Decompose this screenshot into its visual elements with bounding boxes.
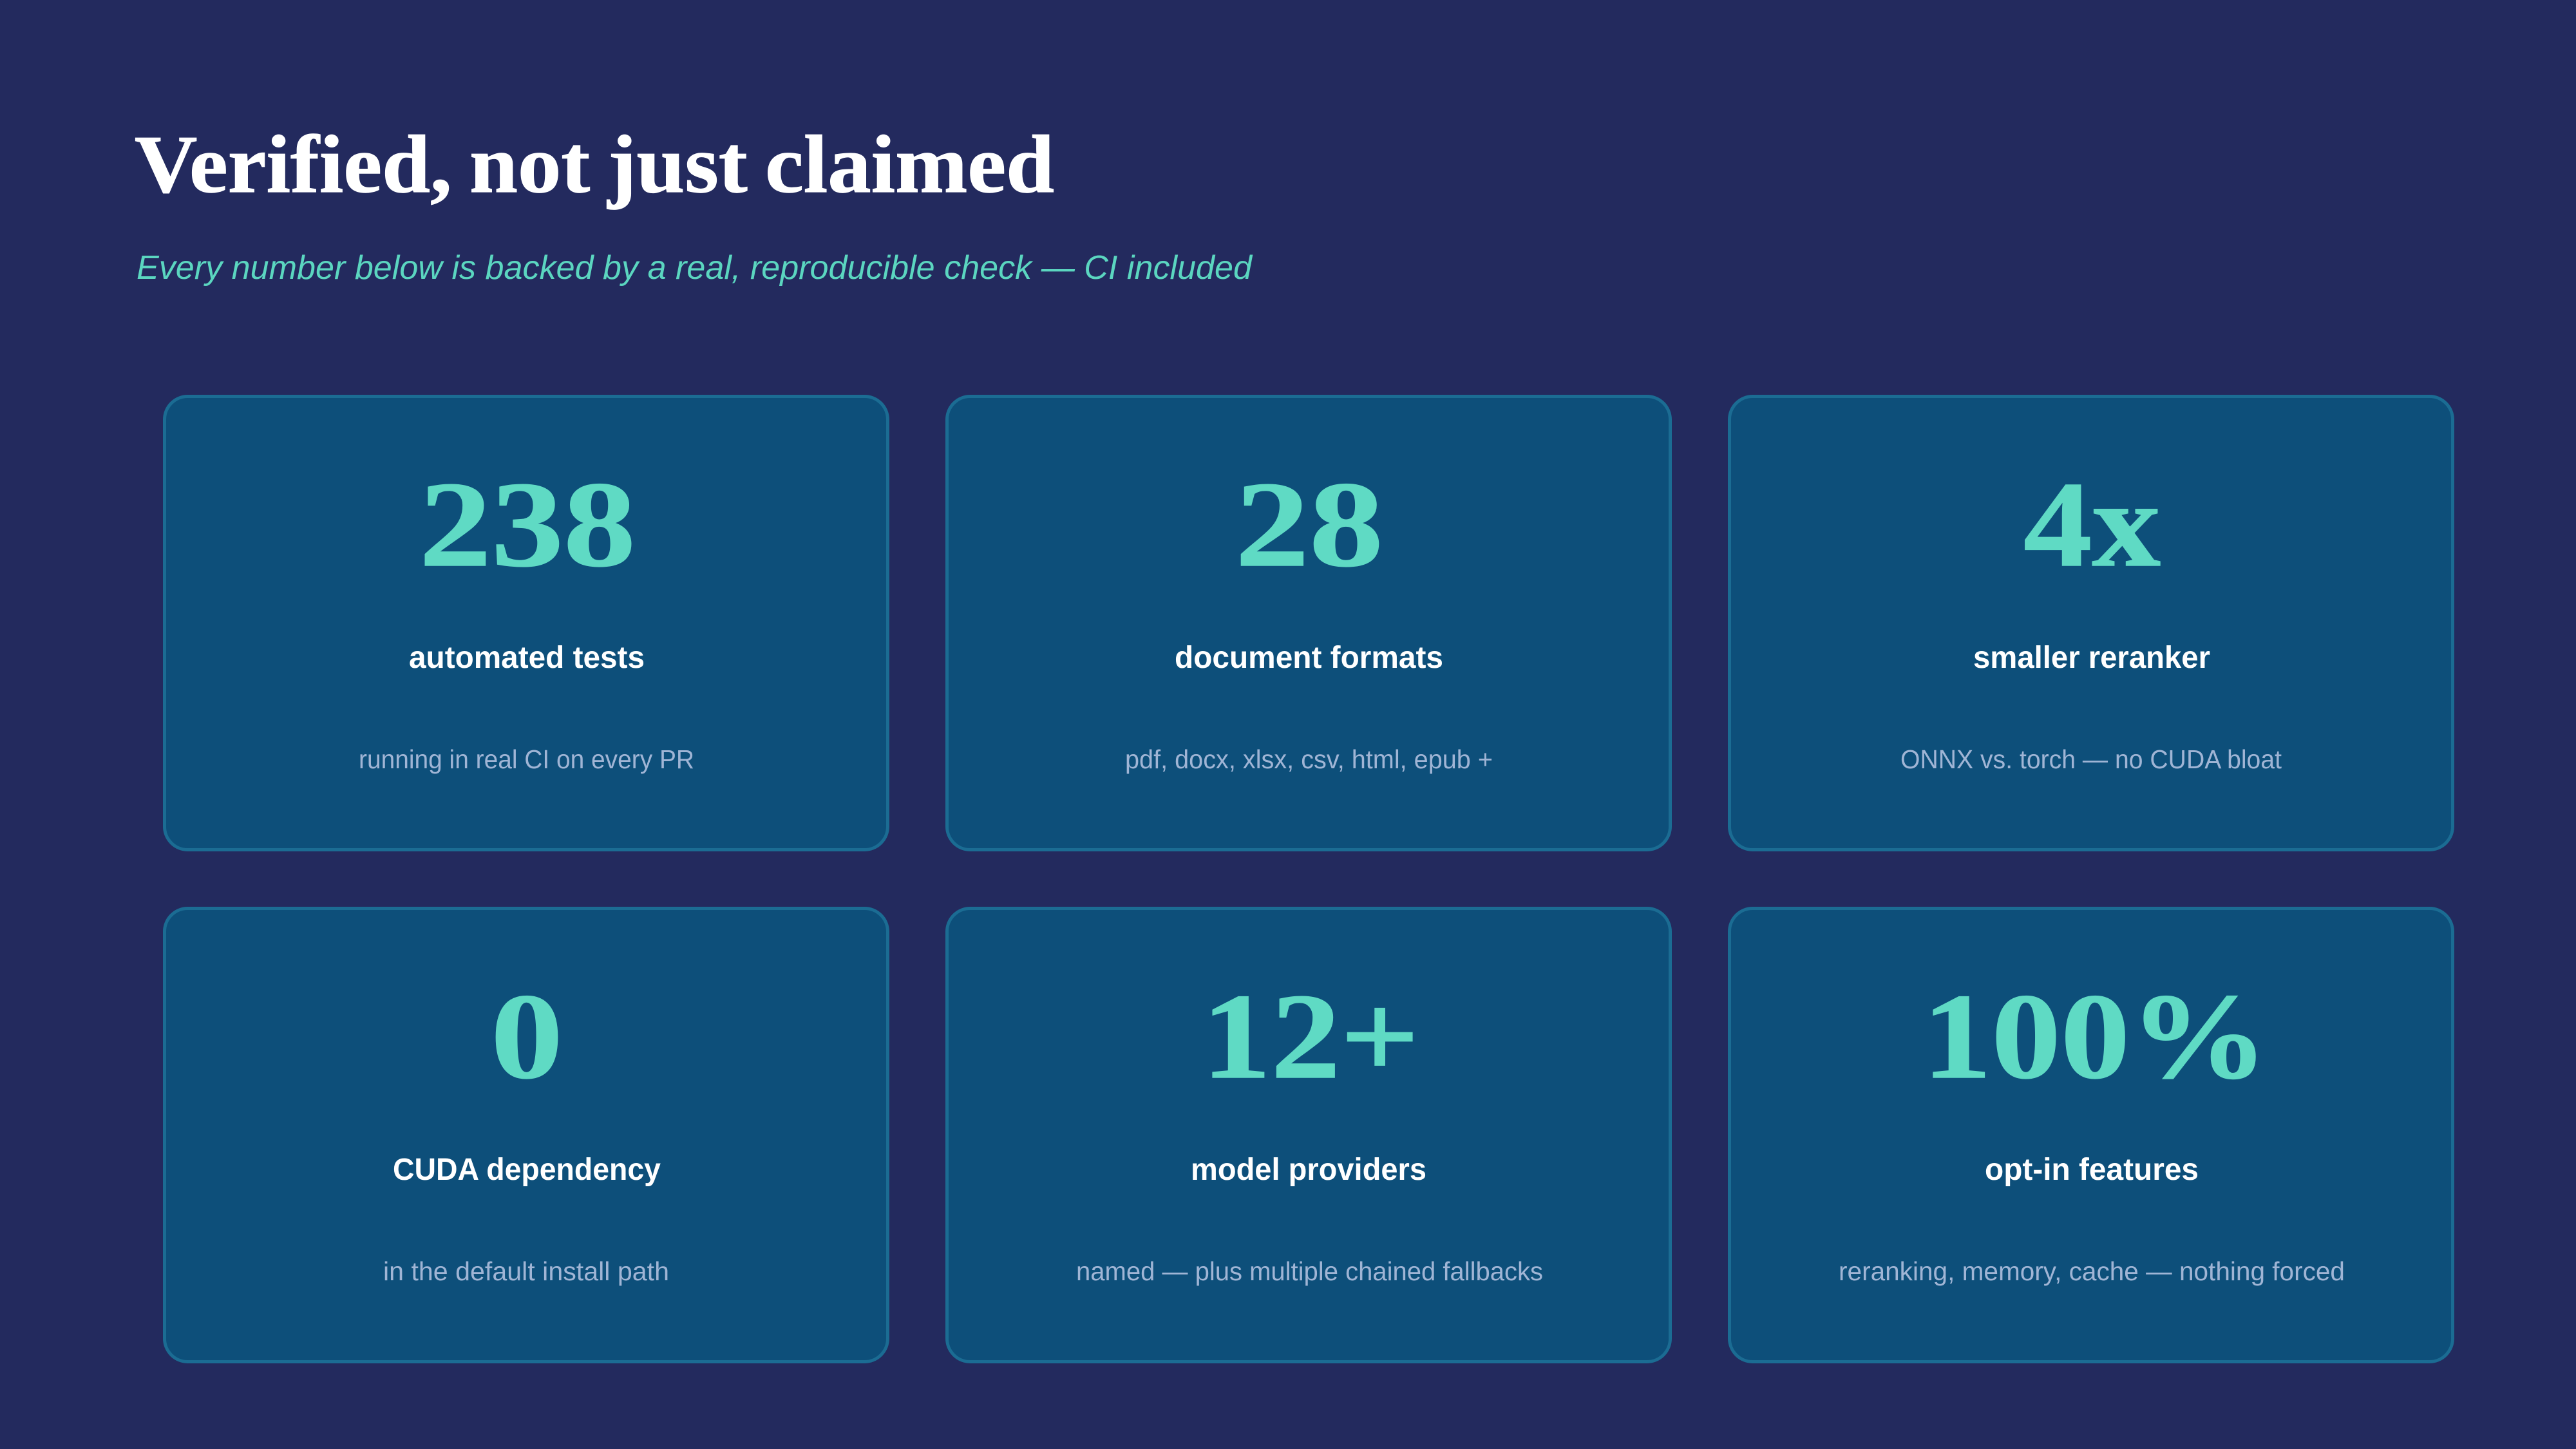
panel: automated tests <box>165 397 887 850</box>
panel: model providers <box>947 908 1671 1361</box>
panel: document formats <box>947 397 1671 850</box>
stat value: 12+: 12+ <box>1202 969 1419 1104</box>
panel: smaller reranker <box>1730 397 2452 850</box>
stat label: CUDA dependency: CUDA dependency <box>393 1153 661 1187</box>
stat label: model providers: model providers <box>1191 1153 1426 1187</box>
title: Verified, not just claimed <box>135 118 1054 210</box>
stat description: nothing forced: reranking, memory, cache — nothing forced <box>1839 1256 2345 1286</box>
stat value: 28: 28 <box>1235 457 1383 592</box>
stat description: ONNX vs. torch: ONNX vs. torch — no CUDA bloat <box>1900 744 2282 774</box>
panel: CUDA dependency <box>165 908 887 1361</box>
stat label: opt-in features: opt-in features <box>1985 1153 2199 1187</box>
stat label: document formats: document formats <box>1175 641 1443 675</box>
stat description: chained fallbacks: named — plus multiple chained fallbacks <box>1076 1256 1543 1286</box>
panel: opt-in features <box>1730 908 2452 1361</box>
stat label: automated tests: automated tests <box>409 641 645 675</box>
stat description: format list: pdf, docx, xlsx, csv, html, epub + <box>1125 744 1493 774</box>
subtitle: Every number below is backed by a real, reproducible check — CI included <box>137 249 1253 287</box>
stat value: 100%: 100% <box>1922 969 2268 1104</box>
stat value: 0: 0 <box>491 969 563 1104</box>
stat description: running in real CI: running in real CI on every PR <box>359 744 694 774</box>
stat value: 4x: 4x <box>2023 457 2161 592</box>
stat description: default install path: in the default install path <box>383 1256 669 1286</box>
stat label: smaller reranker: smaller reranker <box>1973 641 2210 675</box>
stat value: 238: 238 <box>419 457 636 592</box>
